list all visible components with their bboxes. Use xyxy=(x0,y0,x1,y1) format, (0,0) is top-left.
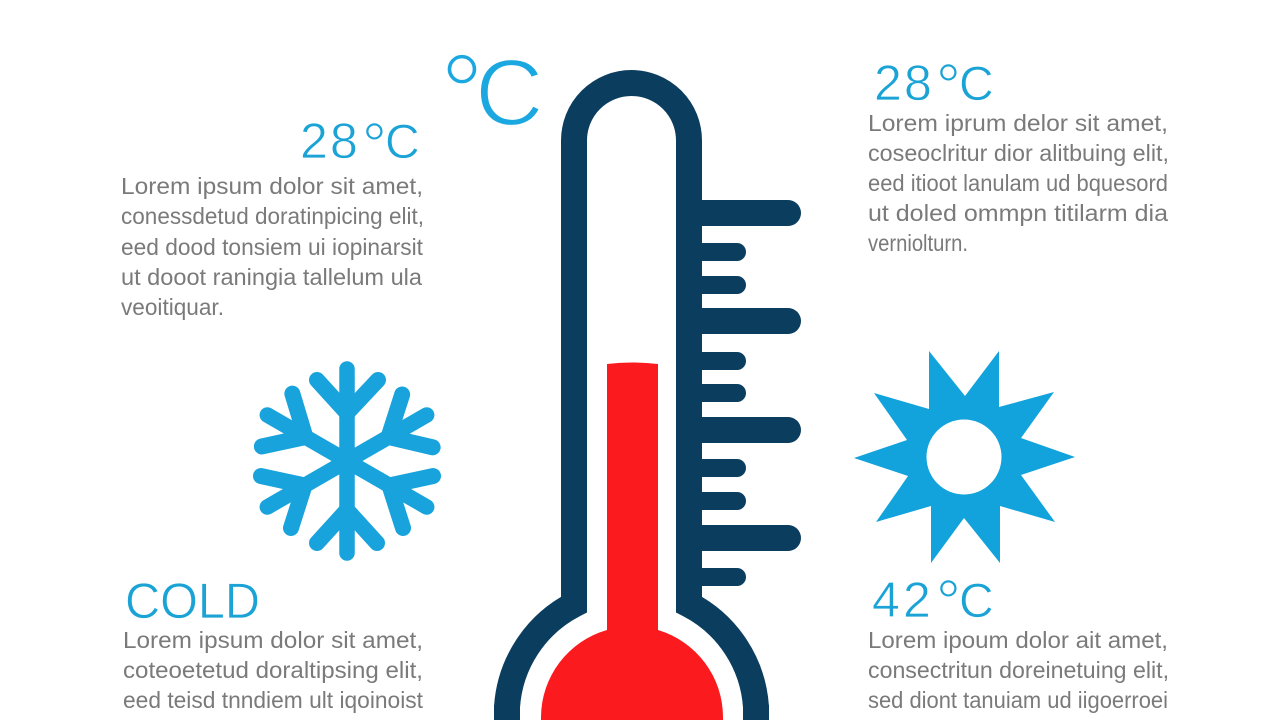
text block: left upper paragraph: conessdetud doratinpicing elit, xyxy=(121,203,424,229)
panel: bottom right temperature text xyxy=(868,568,1169,713)
text block: right lower paragraph: consectritun doreinetuing elit, xyxy=(868,657,1169,683)
red mercury column and bulb xyxy=(541,362,723,720)
snowflake diagonal arm one xyxy=(252,389,442,534)
icon: degrees Celsius symbol: C xyxy=(475,40,544,146)
panel: top right temperature text xyxy=(868,52,1169,256)
text block: left upper paragraph: ut dooot raningia tallelum ula xyxy=(121,264,422,290)
text block: right lower paragraph: sed diont tanuiam ud iigoerroei xyxy=(868,687,1168,713)
icon: degrees Celsius symbol xyxy=(440,32,544,155)
heading: 42°C: ° xyxy=(936,568,961,637)
text block: right lower paragraph xyxy=(868,627,1169,713)
text block: left lower paragraph: eed teisd tnndiem ult iqoinoist xyxy=(123,687,424,713)
text block: right upper paragraph: Lorem iprum delor sit amet, xyxy=(868,110,1168,136)
text block: right lower paragraph: Lorem ipoum dolor ait amet, xyxy=(868,627,1168,653)
icon: sun xyxy=(854,351,1075,563)
icon: snowflake xyxy=(252,369,442,553)
thermometer outline xyxy=(507,83,756,707)
thermometer xyxy=(494,83,801,720)
snowflake diagonal arm two xyxy=(252,388,442,533)
heading: 42°C: 42 xyxy=(872,572,931,628)
heading: COLD: COLD xyxy=(125,573,260,629)
heading: 28°C left: ° xyxy=(362,111,387,180)
text block: left lower paragraph xyxy=(123,627,424,713)
text block: left upper paragraph: eed dood tonsiem ui iopinarsit xyxy=(121,234,424,260)
thermometer outline base xyxy=(494,705,769,720)
snowflake vertical arm xyxy=(317,369,378,553)
panel: bottom left cold text xyxy=(123,573,424,713)
text block: left lower paragraph: Lorem ipsum dolor sit amet, xyxy=(123,627,423,653)
panel: top left temperature text xyxy=(121,111,424,320)
text block: left lower paragraph: coteoetetud doraltipsing elit, xyxy=(123,657,423,683)
heading: 28°C right: 28 xyxy=(874,55,932,111)
text block: right upper paragraph: coseoclritur dior alitbuing elit, xyxy=(868,140,1169,166)
heading: 28°C right: ° xyxy=(936,52,961,121)
icon: degrees Celsius symbol: ° xyxy=(440,32,484,155)
heading: 42°C: C xyxy=(959,575,994,628)
text block: left upper paragraph: veoitiquar. xyxy=(121,294,224,320)
text block: left upper paragraph xyxy=(121,173,424,320)
text block: right upper paragraph: ut doled ommpn titilarm dia xyxy=(868,200,1168,226)
heading: 28°C left: 28 xyxy=(300,113,358,169)
text block: right upper paragraph xyxy=(868,110,1169,256)
thermometer tick marks xyxy=(680,200,801,586)
text block: right upper paragraph: eed itioot lanulam ud bquesord xyxy=(868,170,1168,196)
heading: 28°C right: C xyxy=(959,58,994,111)
text block: right upper paragraph: verniolturn. xyxy=(868,230,968,256)
heading: 28°C left: C xyxy=(385,116,420,169)
text block: left upper paragraph: Lorem ipsum dolor sit amet, xyxy=(121,173,423,199)
